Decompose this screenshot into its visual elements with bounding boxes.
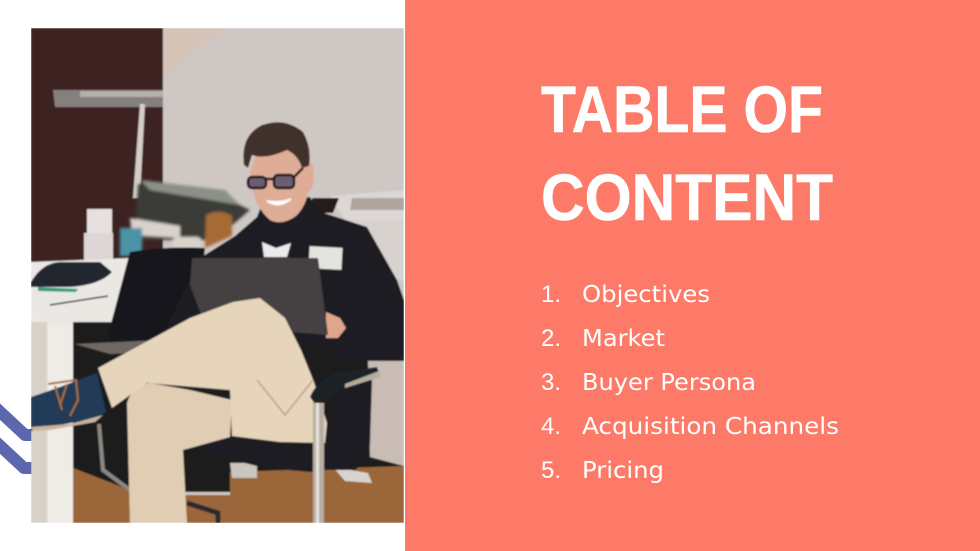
- icon: blue zigzag decoration: [0, 407, 36, 468]
- laptop: [190, 258, 328, 335]
- wall right: [368, 361, 404, 466]
- seat: [244, 462, 314, 473]
- notebook: [31, 289, 108, 305]
- list numbers: 4.: [541, 413, 561, 440]
- trousers lower leg: [127, 383, 232, 523]
- trousers upper leg: [98, 298, 327, 443]
- list numbers: 1.: [541, 281, 561, 308]
- photo: man with laptop in an office chair: [31, 28, 404, 523]
- white boxes: [84, 209, 113, 267]
- chair back: [110, 246, 206, 324]
- chair base: [99, 424, 130, 490]
- sweater: [176, 196, 404, 324]
- desk lamp: [53, 90, 163, 198]
- printer and papers: [312, 190, 404, 280]
- desk: [31, 258, 130, 523]
- floor and under-desk shadow: [73, 322, 404, 492]
- dark wall panel: [31, 28, 163, 266]
- shoe: [31, 373, 106, 431]
- power strip: [333, 467, 372, 483]
- list numbers: 2.: [541, 325, 561, 352]
- list of contents: Pricing: [582, 458, 664, 484]
- chair arm and leg: [310, 367, 380, 523]
- list of contents: [582, 282, 839, 484]
- list numbers: 3.: [541, 369, 561, 396]
- title: [541, 72, 833, 234]
- list numbers: [541, 281, 561, 484]
- hand: [326, 312, 346, 338]
- name tag: [308, 246, 343, 270]
- title: TABLE OF: [541, 72, 823, 146]
- list of contents: Buyer Persona: [582, 370, 756, 396]
- keyboard: [31, 262, 112, 287]
- title: CONTENT: [541, 160, 833, 234]
- list of contents: Market: [582, 326, 665, 352]
- list numbers: 5.: [541, 457, 561, 484]
- wall: [162, 28, 404, 496]
- chair backrest right: [326, 379, 373, 471]
- head: [243, 122, 314, 222]
- sweater logo: [262, 242, 291, 257]
- list of contents: Acquisition Channels: [582, 414, 839, 440]
- desk clutter: [120, 180, 250, 256]
- glasses: [248, 168, 303, 188]
- list of contents: Objectives: [582, 282, 710, 308]
- coral panel: [405, 0, 980, 551]
